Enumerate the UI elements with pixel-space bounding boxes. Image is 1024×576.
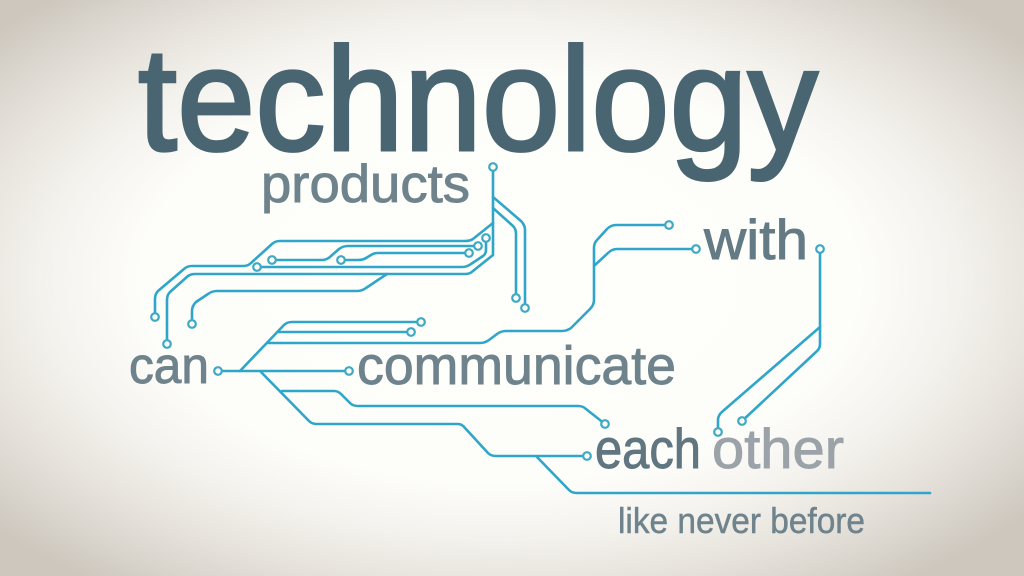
nodes: with: [714, 245, 824, 436]
word: communicate: communicate: [357, 336, 676, 396]
nodes: can: [214, 221, 700, 460]
circuit: products traces: [151, 163, 529, 348]
title: technology: technology: [138, 18, 818, 182]
word: each: each: [595, 417, 701, 480]
circuit: can traces: [214, 221, 930, 493]
word: like never before: like never before: [618, 500, 865, 541]
nodes: products: [151, 163, 529, 348]
word: other: other: [712, 417, 844, 480]
circuit: with traces: [714, 245, 824, 436]
word: can: can: [129, 337, 209, 394]
word: with: with: [703, 208, 808, 271]
word: products: products: [261, 155, 470, 214]
